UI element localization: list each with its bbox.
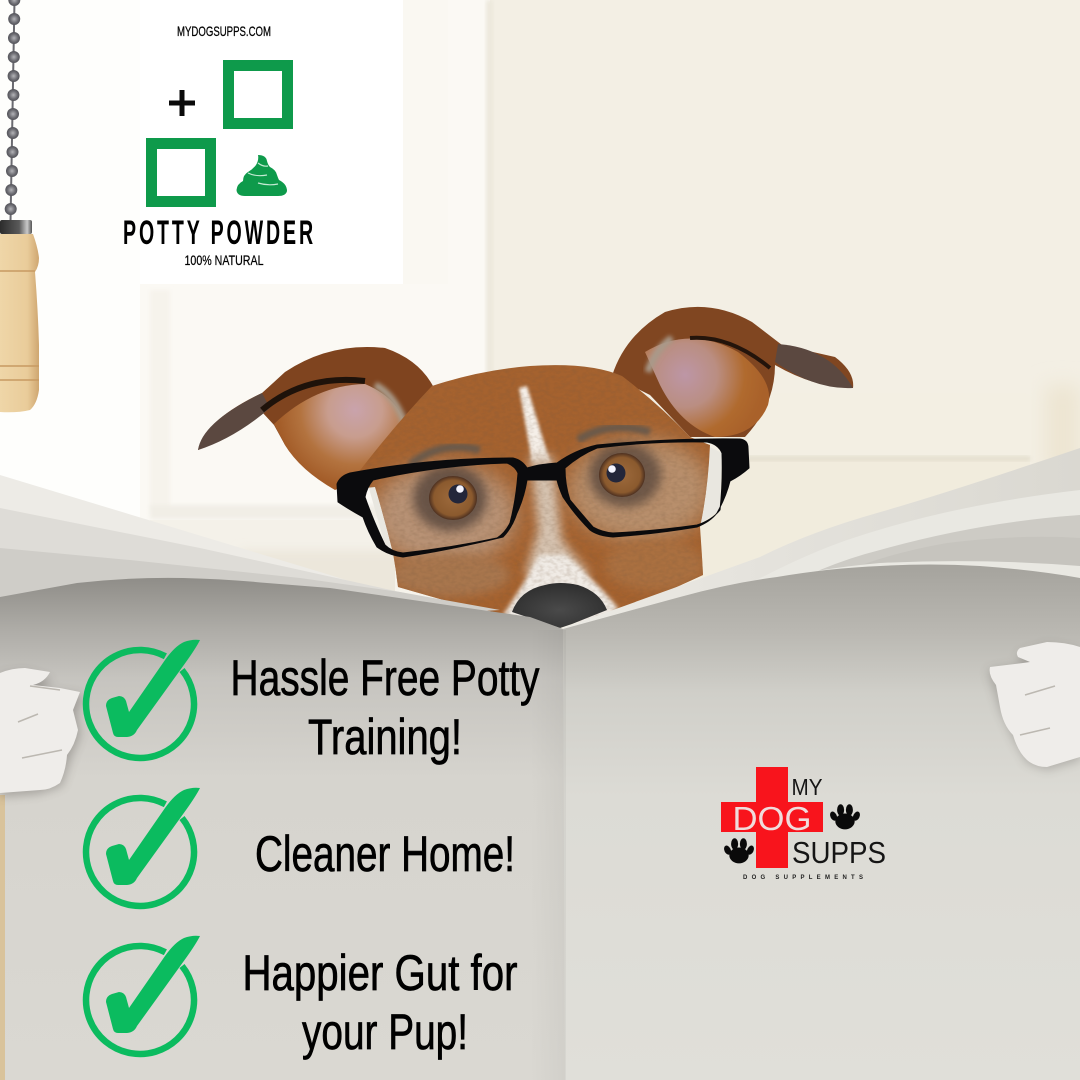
- tagline: DOG SUPPLEMENTS: [743, 875, 865, 881]
- check icon 1: [86, 640, 200, 758]
- left eye: [413, 465, 487, 531]
- tan strip: [0, 795, 5, 1080]
- right brow: [578, 428, 650, 440]
- my dog supps logo: [721, 767, 886, 881]
- word: my: MY: [792, 774, 822, 800]
- product name: POTTY POWDER: [123, 214, 316, 252]
- right paw: [988, 642, 1080, 770]
- benefit 1: Hassle Free Potty: [230, 650, 540, 706]
- white blaze: [519, 386, 550, 462]
- green square bottom: [152, 144, 210, 202]
- check icon 3: [86, 936, 200, 1054]
- fifth sheet right: [700, 561, 1080, 640]
- second sheet right: [720, 490, 1080, 640]
- newspaper: [0, 448, 1080, 1080]
- left ear: [198, 347, 434, 492]
- dog: [198, 307, 853, 630]
- fur texture: [368, 366, 709, 619]
- checklist: [86, 640, 539, 1060]
- glasses: [337, 439, 749, 557]
- toilet tank: [700, 385, 1080, 585]
- pull chain with wooden handle: [0, 0, 39, 412]
- green square top: [228, 66, 288, 124]
- benefit 3: [242, 945, 518, 1060]
- left brow: [410, 447, 480, 465]
- third sheet right: [760, 515, 1080, 640]
- nose: [512, 583, 607, 628]
- right page: [563, 564, 1080, 1080]
- white muzzle: [503, 555, 618, 625]
- nose bridge: [525, 455, 590, 585]
- benefit 1: [230, 650, 540, 765]
- top sheet left: [0, 475, 563, 640]
- icon: poop: [236, 155, 287, 196]
- word: supps: SUPPS: [792, 835, 886, 870]
- glasses lens glare behind head: [368, 442, 722, 556]
- third sheet left: [0, 548, 500, 640]
- right eye: [589, 443, 661, 507]
- spine shadow: [530, 630, 566, 1080]
- head: [360, 365, 710, 622]
- icon: paw left: [723, 838, 755, 863]
- tagline: 100% NATURAL: [184, 252, 264, 268]
- benefit 3: Happier Gut for: [242, 945, 518, 1001]
- website label: MYDOGSUPPS.COM: [177, 23, 271, 39]
- top sheet right: [563, 448, 1080, 640]
- fourth sheet right: [790, 537, 1080, 640]
- benefit 3: your Pup!: [302, 1004, 468, 1060]
- logo panel: potty powder: [123, 0, 403, 284]
- lower muzzle fur tone: [390, 553, 510, 597]
- left paw: [0, 668, 84, 797]
- icon: paw right: [829, 804, 861, 829]
- check icon 2: [86, 788, 200, 906]
- benefit 1: Training!: [308, 709, 462, 765]
- plus sign: [169, 90, 195, 116]
- lens-area fur tone: [373, 463, 517, 567]
- second sheet left: [0, 508, 540, 640]
- red cross: [721, 767, 823, 868]
- right ear: [612, 307, 853, 437]
- word: dog: DOG: [732, 800, 812, 837]
- benefit 2: Cleaner Home!: [255, 826, 515, 882]
- left page: [0, 578, 566, 1080]
